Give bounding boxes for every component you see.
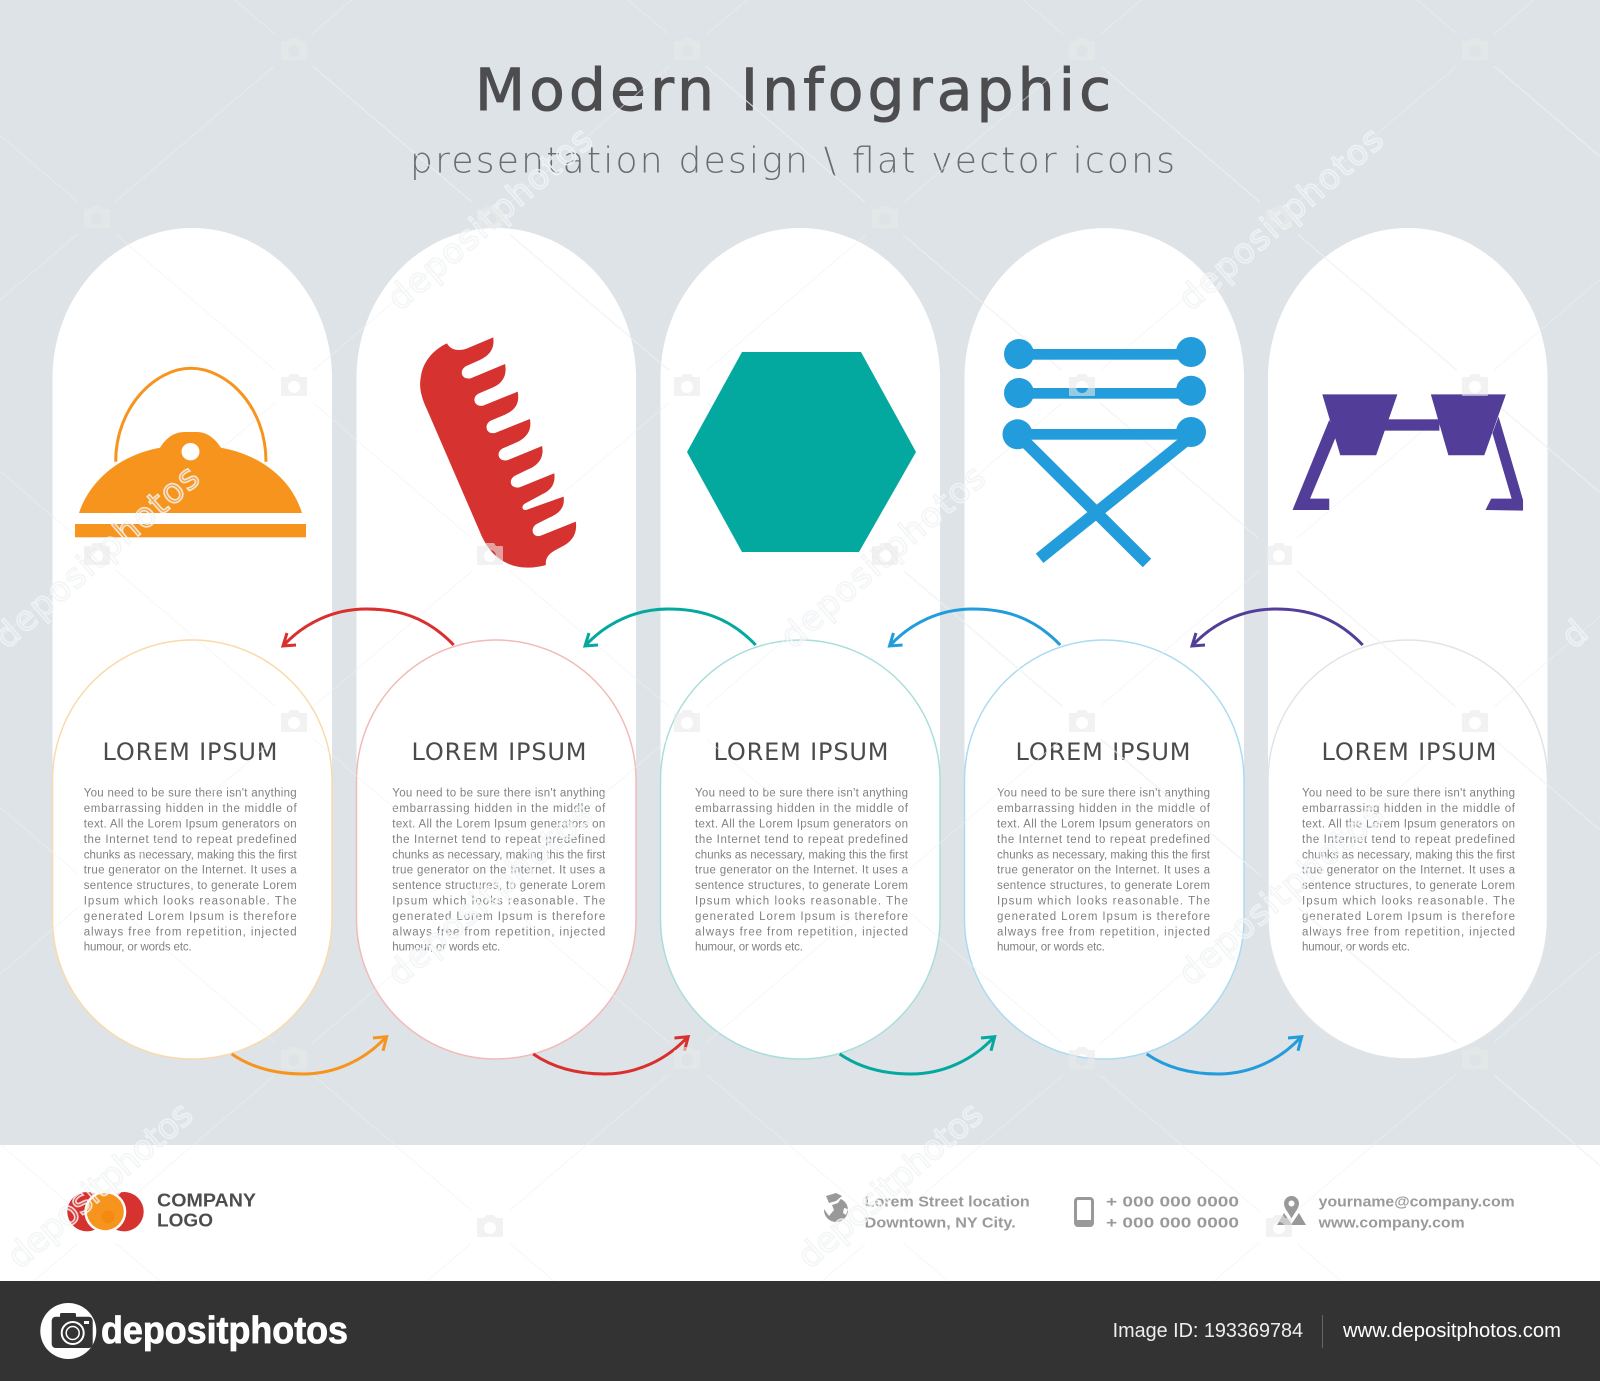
body text 1: the Internet tend to repeat predefined bbox=[84, 834, 297, 846]
body text 4: text. All the Lorem Ipsum generators on bbox=[997, 818, 1210, 830]
arrow: teal back bbox=[585, 609, 756, 646]
watermark text and camera marks: depositphotos bbox=[380, 119, 601, 319]
arrow: red forward bbox=[533, 1037, 688, 1074]
body text 2: embarrassing hidden in the middle of bbox=[392, 803, 606, 815]
body text 5: chunks as necessary, making this the first bbox=[1302, 849, 1516, 861]
body text 4: the Internet tend to repeat predefined bbox=[997, 834, 1210, 846]
body text 1: You need to be sure there isn't anything bbox=[84, 788, 297, 800]
body text 5: generated Lorem Ipsum is therefore bbox=[1302, 911, 1515, 923]
depositphotos wordmark: depositphotos bbox=[101, 1310, 348, 1352]
panel: text oval 1 bbox=[52, 640, 332, 1059]
heading 2: LOREM IPSUM bbox=[412, 738, 586, 766]
arrow: orange forward bbox=[232, 1037, 387, 1074]
image id: Image ID: 193369784 bbox=[1113, 1320, 1303, 1342]
panel: text oval 5 bbox=[1268, 640, 1548, 1059]
body text 5: sentence structures, to generate Lorem bbox=[1302, 880, 1515, 892]
body text 1: chunks as necessary, making this the first bbox=[84, 849, 297, 861]
body text 2: true generator on the Internet. It uses a bbox=[392, 865, 606, 877]
body text 2: generated Lorem Ipsum is therefore bbox=[392, 911, 605, 923]
watermark text and camera marks: d bbox=[1554, 612, 1596, 657]
icon: map pin bbox=[1277, 1196, 1306, 1225]
body text 2: the Internet tend to repeat predefined bbox=[392, 834, 605, 846]
body text 2: chunks as necessary, making this the first bbox=[392, 849, 606, 861]
body text 3: text. All the Lorem Ipsum generators on bbox=[695, 818, 908, 830]
icon: kettle bbox=[75, 368, 306, 537]
site url: www.depositphotos.com bbox=[1342, 1320, 1561, 1342]
panel: top shape 4 bbox=[964, 228, 1244, 800]
body text 5: true generator on the Internet. It uses a bbox=[1302, 865, 1516, 877]
arrow: blue back bbox=[890, 609, 1060, 646]
body text 3: Ipsum which looks reasonable. The bbox=[695, 896, 908, 908]
panel: top shape 3 bbox=[660, 228, 940, 800]
body text 3 bbox=[695, 788, 909, 954]
body text 3: true generator on the Internet. It uses a bbox=[695, 865, 909, 877]
subtitle: presentation design \ flat vector icons bbox=[410, 140, 1175, 182]
icon: hexagon bbox=[687, 352, 916, 552]
body text 1: true generator on the Internet. It uses a bbox=[84, 865, 297, 877]
body text 2: text. All the Lorem Ipsum generators on bbox=[392, 818, 605, 830]
phone text: + 000 000 0000 bbox=[1106, 1214, 1239, 1232]
body text 2: humour, or words etc. bbox=[392, 942, 500, 954]
body text 2: You need to be sure there isn't anything bbox=[392, 788, 605, 800]
body text 1: Ipsum which looks reasonable. The bbox=[84, 896, 297, 908]
panel: text oval 4 bbox=[964, 640, 1244, 1059]
watermark text and camera marks: depositphotos bbox=[790, 1094, 991, 1277]
body text 5 bbox=[1302, 788, 1516, 954]
phone text: + 000 000 0000 bbox=[1106, 1194, 1239, 1211]
body text 5: always free from repetition, injected bbox=[1302, 926, 1515, 938]
heading 1: LOREM IPSUM bbox=[102, 738, 278, 766]
address text bbox=[865, 1194, 1030, 1232]
body text 3: always free from repetition, injected bbox=[695, 926, 908, 938]
arrow: red back bbox=[283, 609, 454, 646]
body text 4: generated Lorem Ipsum is therefore bbox=[997, 911, 1210, 923]
body text 4: humour, or words etc. bbox=[997, 942, 1105, 954]
watermark text and camera marks: depositphotos bbox=[0, 1094, 201, 1277]
watermark text and camera marks: depositphotos bbox=[1171, 119, 1392, 319]
arrow: blue forward bbox=[1147, 1037, 1302, 1074]
phone text bbox=[1106, 1194, 1239, 1232]
body text 4: embarrassing hidden in the middle of bbox=[997, 803, 1211, 815]
address text: Downtown, NY City. bbox=[865, 1214, 1016, 1232]
body text 1: text. All the Lorem Ipsum generators on bbox=[84, 818, 297, 830]
panel: text oval 2 bbox=[356, 640, 636, 1059]
body text 5: the Internet tend to repeat predefined bbox=[1302, 834, 1515, 846]
body text 2: sentence structures, to generate Lorem bbox=[392, 880, 605, 892]
body text 5: You need to be sure there isn't anything bbox=[1302, 788, 1515, 800]
icon: camera badge bbox=[40, 1303, 96, 1359]
watermark text and camera marks: depositphotos bbox=[773, 457, 994, 657]
body text 1: always free from repetition, injected bbox=[84, 926, 297, 938]
body text 1: humour, or words etc. bbox=[84, 942, 192, 954]
body text 4: You need to be sure there isn't anything bbox=[997, 788, 1210, 800]
icon: globe bbox=[824, 1193, 848, 1222]
body text 4: true generator on the Internet. It uses a bbox=[997, 865, 1211, 877]
address text: Lorem Street location bbox=[865, 1194, 1030, 1211]
panel: text oval 3 bbox=[660, 640, 940, 1059]
body text 1: generated Lorem Ipsum is therefore bbox=[84, 911, 297, 923]
logo mark bbox=[67, 1191, 144, 1233]
heading 5: LOREM IPSUM bbox=[1322, 738, 1496, 766]
body text 1: sentence structures, to generate Lorem bbox=[84, 880, 297, 892]
arrow: purple back bbox=[1192, 609, 1363, 646]
body text 5: embarrassing hidden in the middle of bbox=[1302, 803, 1516, 815]
logo text: COMPANY bbox=[157, 1191, 256, 1211]
contact text bbox=[1318, 1194, 1515, 1232]
watermark text and camera marks: depositphotos bbox=[1171, 794, 1392, 994]
body text 3: the Internet tend to repeat predefined bbox=[695, 834, 908, 846]
watermark text and camera marks: depositphotos bbox=[380, 794, 601, 994]
white footer band bbox=[0, 1145, 1600, 1281]
body text 4 bbox=[997, 788, 1211, 954]
body text 5: text. All the Lorem Ipsum generators on bbox=[1302, 818, 1515, 830]
panel: top shape 2 bbox=[356, 228, 636, 800]
separator bbox=[1322, 1315, 1323, 1348]
body text 2: Ipsum which looks reasonable. The bbox=[392, 896, 605, 908]
icon: comb bbox=[420, 337, 576, 568]
contact text: yourname@company.com bbox=[1319, 1194, 1515, 1211]
body text 1: embarrassing hidden in the middle of bbox=[84, 803, 297, 815]
contact text: www.company.com bbox=[1318, 1214, 1465, 1232]
title: Modern Infographic bbox=[475, 56, 1111, 124]
body text 3: You need to be sure there isn't anything bbox=[695, 788, 908, 800]
panel: top shape 5 bbox=[1268, 228, 1548, 800]
body text 3: embarrassing hidden in the middle of bbox=[695, 803, 909, 815]
body text 4: Ipsum which looks reasonable. The bbox=[997, 896, 1210, 908]
body text 5: humour, or words etc. bbox=[1302, 942, 1410, 954]
body text 3: chunks as necessary, making this the first bbox=[695, 849, 909, 861]
body text 3: sentence structures, to generate Lorem bbox=[695, 880, 908, 892]
body text 4: always free from repetition, injected bbox=[997, 926, 1210, 938]
arrow: teal forward bbox=[840, 1037, 995, 1074]
icon: folding chair bbox=[1002, 337, 1206, 563]
heading 4: LOREM IPSUM bbox=[1016, 738, 1190, 766]
body text 2 bbox=[392, 788, 606, 954]
body text 3: humour, or words etc. bbox=[695, 942, 803, 954]
body text 5: Ipsum which looks reasonable. The bbox=[1302, 896, 1515, 908]
logo text bbox=[157, 1191, 256, 1231]
logo text: LOGO bbox=[157, 1211, 213, 1231]
body text 4: chunks as necessary, making this the first bbox=[997, 849, 1211, 861]
body text 4: sentence structures, to generate Lorem bbox=[997, 880, 1210, 892]
body text 1 bbox=[84, 788, 297, 954]
icon: sunglasses bbox=[1293, 394, 1523, 511]
panel: top shape 1 bbox=[52, 228, 332, 800]
dark credit bar bbox=[0, 1281, 1600, 1381]
heading 3: LOREM IPSUM bbox=[714, 738, 888, 766]
icon: phone bbox=[1076, 1198, 1092, 1226]
body text 2: always free from repetition, injected bbox=[392, 926, 605, 938]
body text 3: generated Lorem Ipsum is therefore bbox=[695, 911, 908, 923]
